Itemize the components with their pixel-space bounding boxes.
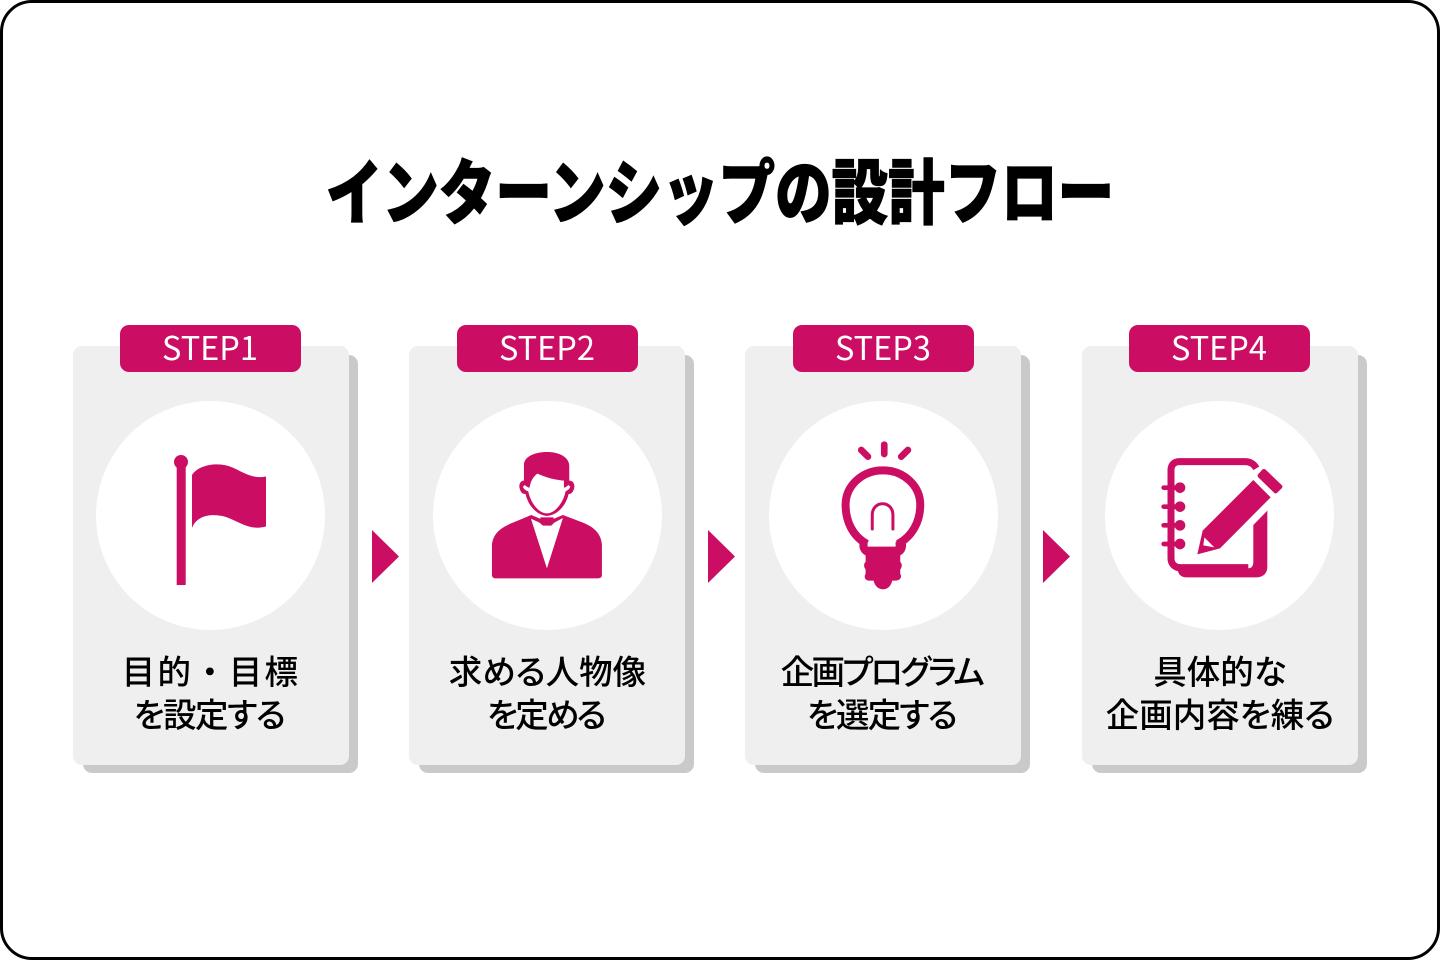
card body <box>745 346 1021 765</box>
step badge <box>120 325 301 372</box>
card shadow <box>83 355 358 773</box>
card shadow <box>755 355 1030 773</box>
icon circle <box>433 401 662 630</box>
step description: 求める人物像 <box>449 645 646 694</box>
step description <box>122 645 300 737</box>
card shadow <box>1092 355 1367 773</box>
step badge: STEP3 <box>835 323 931 370</box>
arrow <box>708 530 735 583</box>
icon: person <box>492 452 602 578</box>
step badge: STEP2 <box>499 323 595 370</box>
step description: 企画内容を練る <box>1106 688 1334 737</box>
icon circle <box>1105 401 1334 630</box>
card shadow <box>419 355 694 773</box>
title: インターンシップの設計フロー <box>326 137 1114 239</box>
step description: を設定する <box>134 688 284 737</box>
step badge <box>1129 325 1310 372</box>
step description: を定める <box>487 688 604 737</box>
card body <box>409 346 685 765</box>
panel: step 3 <box>745 323 1030 773</box>
step badge <box>457 325 638 372</box>
step description: 具体的な <box>1153 645 1287 694</box>
step description <box>781 645 984 737</box>
step description: 企画プログラム <box>781 645 982 694</box>
card body <box>73 346 349 765</box>
arrow <box>1043 530 1070 583</box>
step badge <box>793 325 974 372</box>
card body <box>1082 346 1358 765</box>
step description <box>449 645 646 737</box>
icon: notebook and pencil <box>1161 458 1282 578</box>
icon circle <box>769 401 998 630</box>
step badge: STEP4 <box>1171 323 1267 370</box>
panel: step 2 <box>409 323 694 773</box>
icon: light bulb <box>842 441 924 590</box>
panel: step 1 <box>73 323 358 773</box>
icon: flag <box>174 455 266 585</box>
step badge: STEP1 <box>162 323 258 370</box>
step description: 目的・目標 <box>122 645 300 694</box>
step description: を選定する <box>807 688 956 737</box>
arrow <box>372 530 399 583</box>
step description <box>1106 645 1334 737</box>
panel: step 4 <box>1082 323 1367 773</box>
icon circle <box>96 401 325 630</box>
